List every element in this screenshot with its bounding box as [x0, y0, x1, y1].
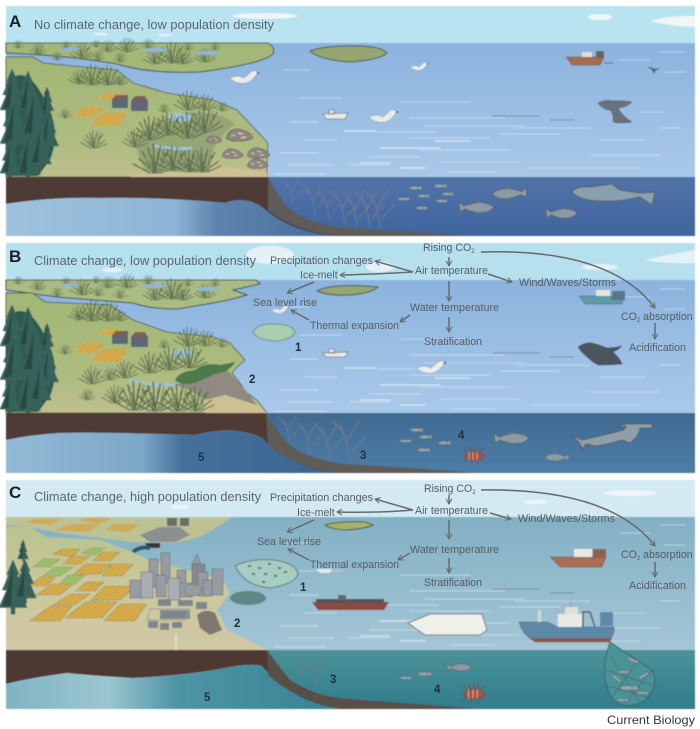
algal bloom: [253, 324, 295, 341]
fish school: [399, 428, 451, 452]
label: sea level rise: Sea level rise: [253, 297, 317, 309]
city: [130, 553, 223, 600]
distant whale fluke: [647, 66, 661, 74]
upper land grass: [12, 274, 221, 300]
wetland reeds: [81, 108, 223, 173]
well: [175, 634, 177, 673]
arrow: air temperature to wind: [488, 274, 512, 282]
sea: [6, 43, 695, 177]
number 5: 5: [198, 452, 205, 464]
underwater layer: [260, 177, 695, 236]
aquifer: [6, 431, 345, 473]
cruise ship: [408, 614, 487, 635]
panel label A: A: [9, 12, 21, 31]
label: water temperature: Water temperature: [410, 544, 499, 556]
panel title C: Climate change, high population density: [34, 489, 262, 504]
underwater layer: [260, 413, 695, 473]
harbour: [133, 518, 190, 552]
panel A artwork: [0, 6, 695, 236]
label: thermal expansion: Thermal expansion: [310, 320, 399, 332]
diagram labels and arrows C: [204, 483, 693, 704]
arrow: air to water temperature: [448, 520, 450, 539]
bloom spots: [248, 564, 287, 582]
breaching whale: [578, 343, 622, 365]
arrow: rising CO2 to air temperature: [448, 257, 450, 266]
underwater layer: [260, 650, 695, 709]
arrow: air temperature to ice-melt: [340, 272, 413, 275]
lower land: [6, 527, 267, 650]
arrow: ice-melt to sea level rise: [287, 520, 314, 532]
soil: [6, 413, 470, 473]
label: wind, waves, storms: Wind/Waves/Storms: [518, 513, 615, 525]
clouds: [170, 490, 656, 509]
number 3: 3: [360, 450, 366, 462]
number 2: 2: [234, 618, 240, 630]
label: CO2 absorption: absorption: [640, 549, 693, 561]
upper land grass: [12, 38, 221, 64]
sky: [6, 6, 695, 43]
upper land: [6, 43, 274, 72]
sand: [205, 385, 267, 413]
sea: [6, 280, 695, 413]
farm fields: [30, 548, 147, 621]
small fishing boat: [323, 110, 348, 119]
pond: [168, 113, 192, 122]
aquifer: [6, 198, 345, 236]
upper land fields: [25, 518, 140, 532]
sea: [6, 517, 695, 650]
fish school: [397, 184, 453, 210]
label: ice-melt: Ice-melt: [297, 507, 335, 519]
number 5: 5: [204, 692, 211, 704]
number 2: 2: [249, 374, 255, 386]
arrow: water temperature to thermal expansion: [400, 315, 410, 322]
polluted plume: [230, 591, 266, 605]
arrow: rising CO2 to air temperature: [448, 495, 450, 504]
label: air temperature: Air temperature: [415, 505, 488, 517]
credit: Current Biology: [607, 714, 695, 727]
farm, trees and houses: [0, 300, 229, 417]
number 1: 1: [300, 582, 307, 594]
arrow: rising CO2 to CO2 absorption: [481, 252, 655, 308]
arrow: ice-melt to sea level rise: [287, 282, 314, 293]
large fish: [572, 184, 655, 205]
wetland reeds: [79, 346, 214, 411]
water streaks: [275, 52, 685, 174]
sky: [6, 480, 695, 517]
orange trawler: [550, 549, 606, 567]
lower land: [6, 57, 268, 177]
label: acidification: Acidification: [629, 580, 686, 592]
arrow: air to water temperature: [448, 281, 450, 301]
number 4: 4: [434, 684, 441, 696]
wetland stream: [155, 146, 192, 149]
label: stratification: Stratification: [424, 577, 482, 589]
arrow: rising CO2 to CO2 absorption: [481, 490, 655, 546]
label: acidification: Acidification: [629, 342, 686, 354]
label: water temperature: Water temperature: [410, 302, 499, 314]
aquifer: [6, 665, 345, 709]
teal boat: [579, 290, 625, 304]
upper land: [6, 280, 260, 309]
sand: [130, 165, 267, 177]
label: rising CO2: Rising CO: [424, 483, 472, 495]
panel label C: C: [9, 483, 21, 502]
label: stratification: Stratification: [424, 336, 482, 348]
label: rising CO2: 2: [472, 490, 476, 496]
farm, trees and houses: [0, 64, 229, 181]
delta rocks: [170, 368, 257, 405]
label: sea level rise: Sea level rise: [257, 536, 321, 548]
lionfish: [462, 445, 487, 465]
fishing net: [604, 642, 655, 706]
large trawler with net: [519, 598, 614, 642]
label: CO2 absorption: 2: [637, 556, 641, 562]
arrow: thermal expansion to sea level rise: [288, 549, 309, 560]
panel C artwork: [0, 480, 695, 709]
lower land: [6, 293, 267, 413]
birds: [230, 63, 429, 123]
label: CO2 absorption: 2: [637, 318, 641, 324]
label: CO2 absorption: absorption: [640, 311, 693, 323]
label: air temperature: Air temperature: [415, 265, 488, 277]
arrow: air temperature to wind: [490, 513, 511, 519]
wetland shading: [135, 112, 235, 172]
container ship: [312, 595, 389, 610]
lionfish: [461, 682, 488, 704]
low buildings and grid: [147, 599, 207, 630]
arrow: air temperature to ice-melt: [337, 510, 413, 512]
sky: [6, 243, 695, 280]
seabed: [268, 177, 478, 236]
fish: [459, 185, 577, 220]
orange boat: [566, 51, 613, 65]
soil: [6, 177, 470, 236]
panel title A: No climate change, low population density: [34, 17, 275, 32]
sparse corals: [291, 658, 334, 697]
arrow: water temperature to thermal expansion: [398, 553, 410, 560]
distant island: [317, 286, 378, 295]
arrow: water temperature to stratification: [448, 558, 450, 573]
number 4: 4: [458, 430, 465, 442]
arrow: air temperature to precipitation: [375, 499, 413, 510]
algal bloom: [235, 560, 298, 588]
upper land: [6, 517, 233, 543]
stream: [128, 368, 225, 386]
coastal rocks: [206, 129, 270, 169]
fish: [399, 662, 471, 680]
distant island: [310, 46, 387, 62]
label: wind, waves, storms: Wind/Waves/Storms: [519, 277, 616, 289]
branching corals: [278, 416, 365, 462]
branching corals: [282, 180, 394, 228]
seabed: [267, 650, 478, 709]
panel B: climate change, low population density: [0, 242, 695, 473]
panel A: no climate change, low population density: [0, 6, 695, 236]
label: thermal expansion: Thermal expansion: [310, 559, 399, 571]
label: CO2 absorption: CO: [621, 549, 637, 561]
arrow: air temperature to precipitation: [375, 261, 413, 272]
arrow: thermal expansion to sea level rise: [291, 310, 309, 320]
arrow: absorption to acidification: [654, 562, 656, 577]
panel title B: Climate change, low population density: [34, 253, 257, 268]
label: rising CO2: Rising CO: [423, 242, 471, 254]
trees: [0, 539, 37, 614]
birds: [272, 306, 447, 374]
seabed: [266, 413, 478, 473]
whale tail: [598, 100, 632, 123]
small white boat: [316, 569, 332, 573]
label: CO2 absorption: CO: [621, 311, 637, 323]
distant island: [325, 522, 373, 530]
small fishing boat: [323, 349, 348, 357]
label: rising CO2: 2: [471, 249, 475, 255]
coastal rocks: [197, 611, 222, 635]
diagram labels and arrows B: [198, 242, 693, 464]
green mangrove patch: [175, 362, 235, 384]
arrow: water temperature to stratification: [448, 317, 450, 332]
soil: [6, 650, 470, 709]
fish: [494, 431, 569, 463]
label: precipitation changes: Precipitation changes: [270, 255, 373, 267]
pond: [170, 349, 192, 357]
label: precipitation changes: Precipitation changes: [270, 492, 373, 504]
panel B artwork: [0, 243, 695, 473]
water streaks: [275, 525, 685, 647]
number 1: 1: [295, 342, 302, 354]
number 3: 3: [330, 674, 336, 686]
label: ice-melt: Ice-melt: [300, 270, 338, 282]
panel label B: B: [9, 247, 21, 266]
hammerhead shark: [572, 424, 652, 450]
water streaks: [275, 289, 685, 411]
panel C: climate change, high population density: [0, 480, 695, 709]
clouds: [94, 13, 695, 36]
clouds: [102, 246, 695, 272]
arrow: absorption to acidification: [654, 323, 656, 339]
